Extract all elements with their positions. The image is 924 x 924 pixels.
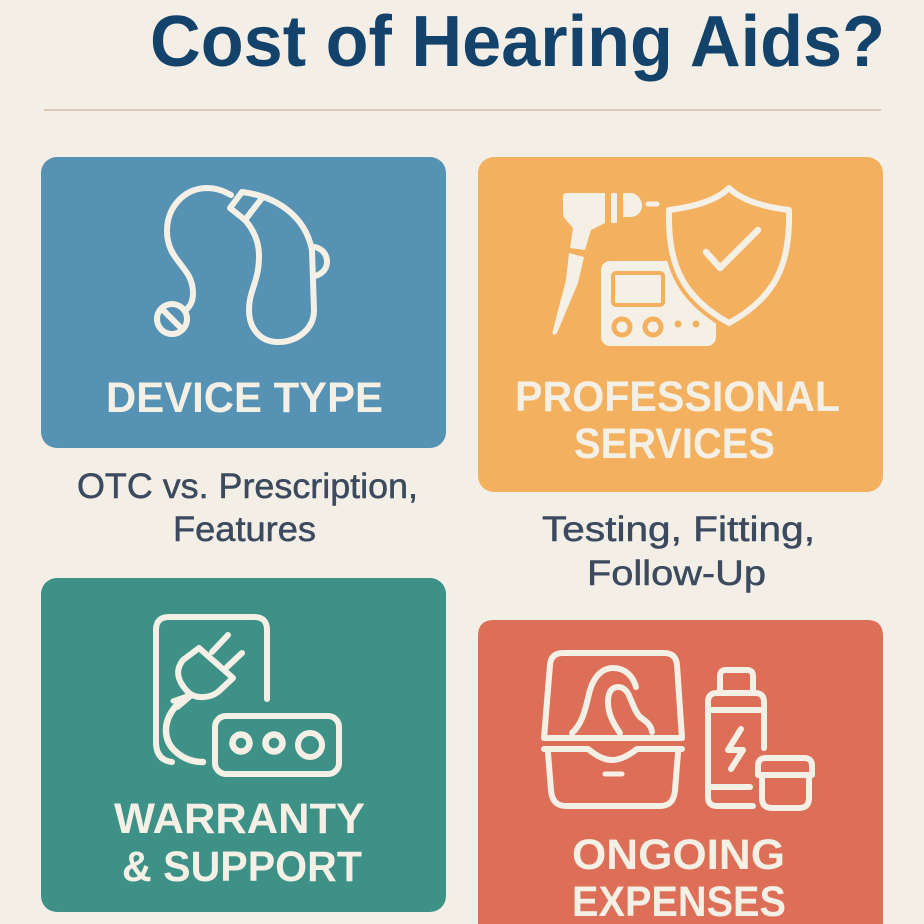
heading: warranty and support bbox=[114, 795, 365, 891]
panel: professional services bbox=[478, 157, 883, 492]
heading: professional services: PROFESSIONAL bbox=[515, 373, 840, 421]
panel: ongoing expenses bbox=[478, 620, 883, 924]
heading: warranty and support: WARRANTY bbox=[114, 795, 365, 843]
caption: professional services: Testing, Fitting, bbox=[542, 510, 815, 549]
heading: ongoing expenses bbox=[572, 831, 786, 924]
heading: ongoing expenses: ONGOING bbox=[572, 831, 785, 879]
icon: behind-the-ear hearing aid bbox=[157, 188, 327, 342]
caption: device type: Features bbox=[173, 510, 316, 549]
caption: professional services bbox=[542, 510, 815, 593]
icon: plug and power strip bbox=[156, 617, 339, 774]
icon: otoscope, audiometer and shield bbox=[552, 188, 789, 346]
title: Cost of Hearing Aids? bbox=[150, 2, 885, 82]
caption: device type: OTC vs. Prescription, bbox=[77, 467, 418, 506]
caption: professional services: Follow-Up bbox=[587, 554, 766, 593]
heading: warranty and support: & SUPPORT bbox=[122, 843, 362, 891]
icon: ear mold case, battery and jar bbox=[544, 653, 812, 808]
heading: device type: DEVICE TYPE bbox=[106, 374, 383, 422]
heading: professional services: SERVICES bbox=[574, 420, 775, 468]
caption: device type bbox=[77, 467, 418, 549]
panel: warranty and support bbox=[41, 578, 446, 912]
panel: device type bbox=[41, 157, 446, 448]
heading: professional services bbox=[515, 373, 840, 468]
